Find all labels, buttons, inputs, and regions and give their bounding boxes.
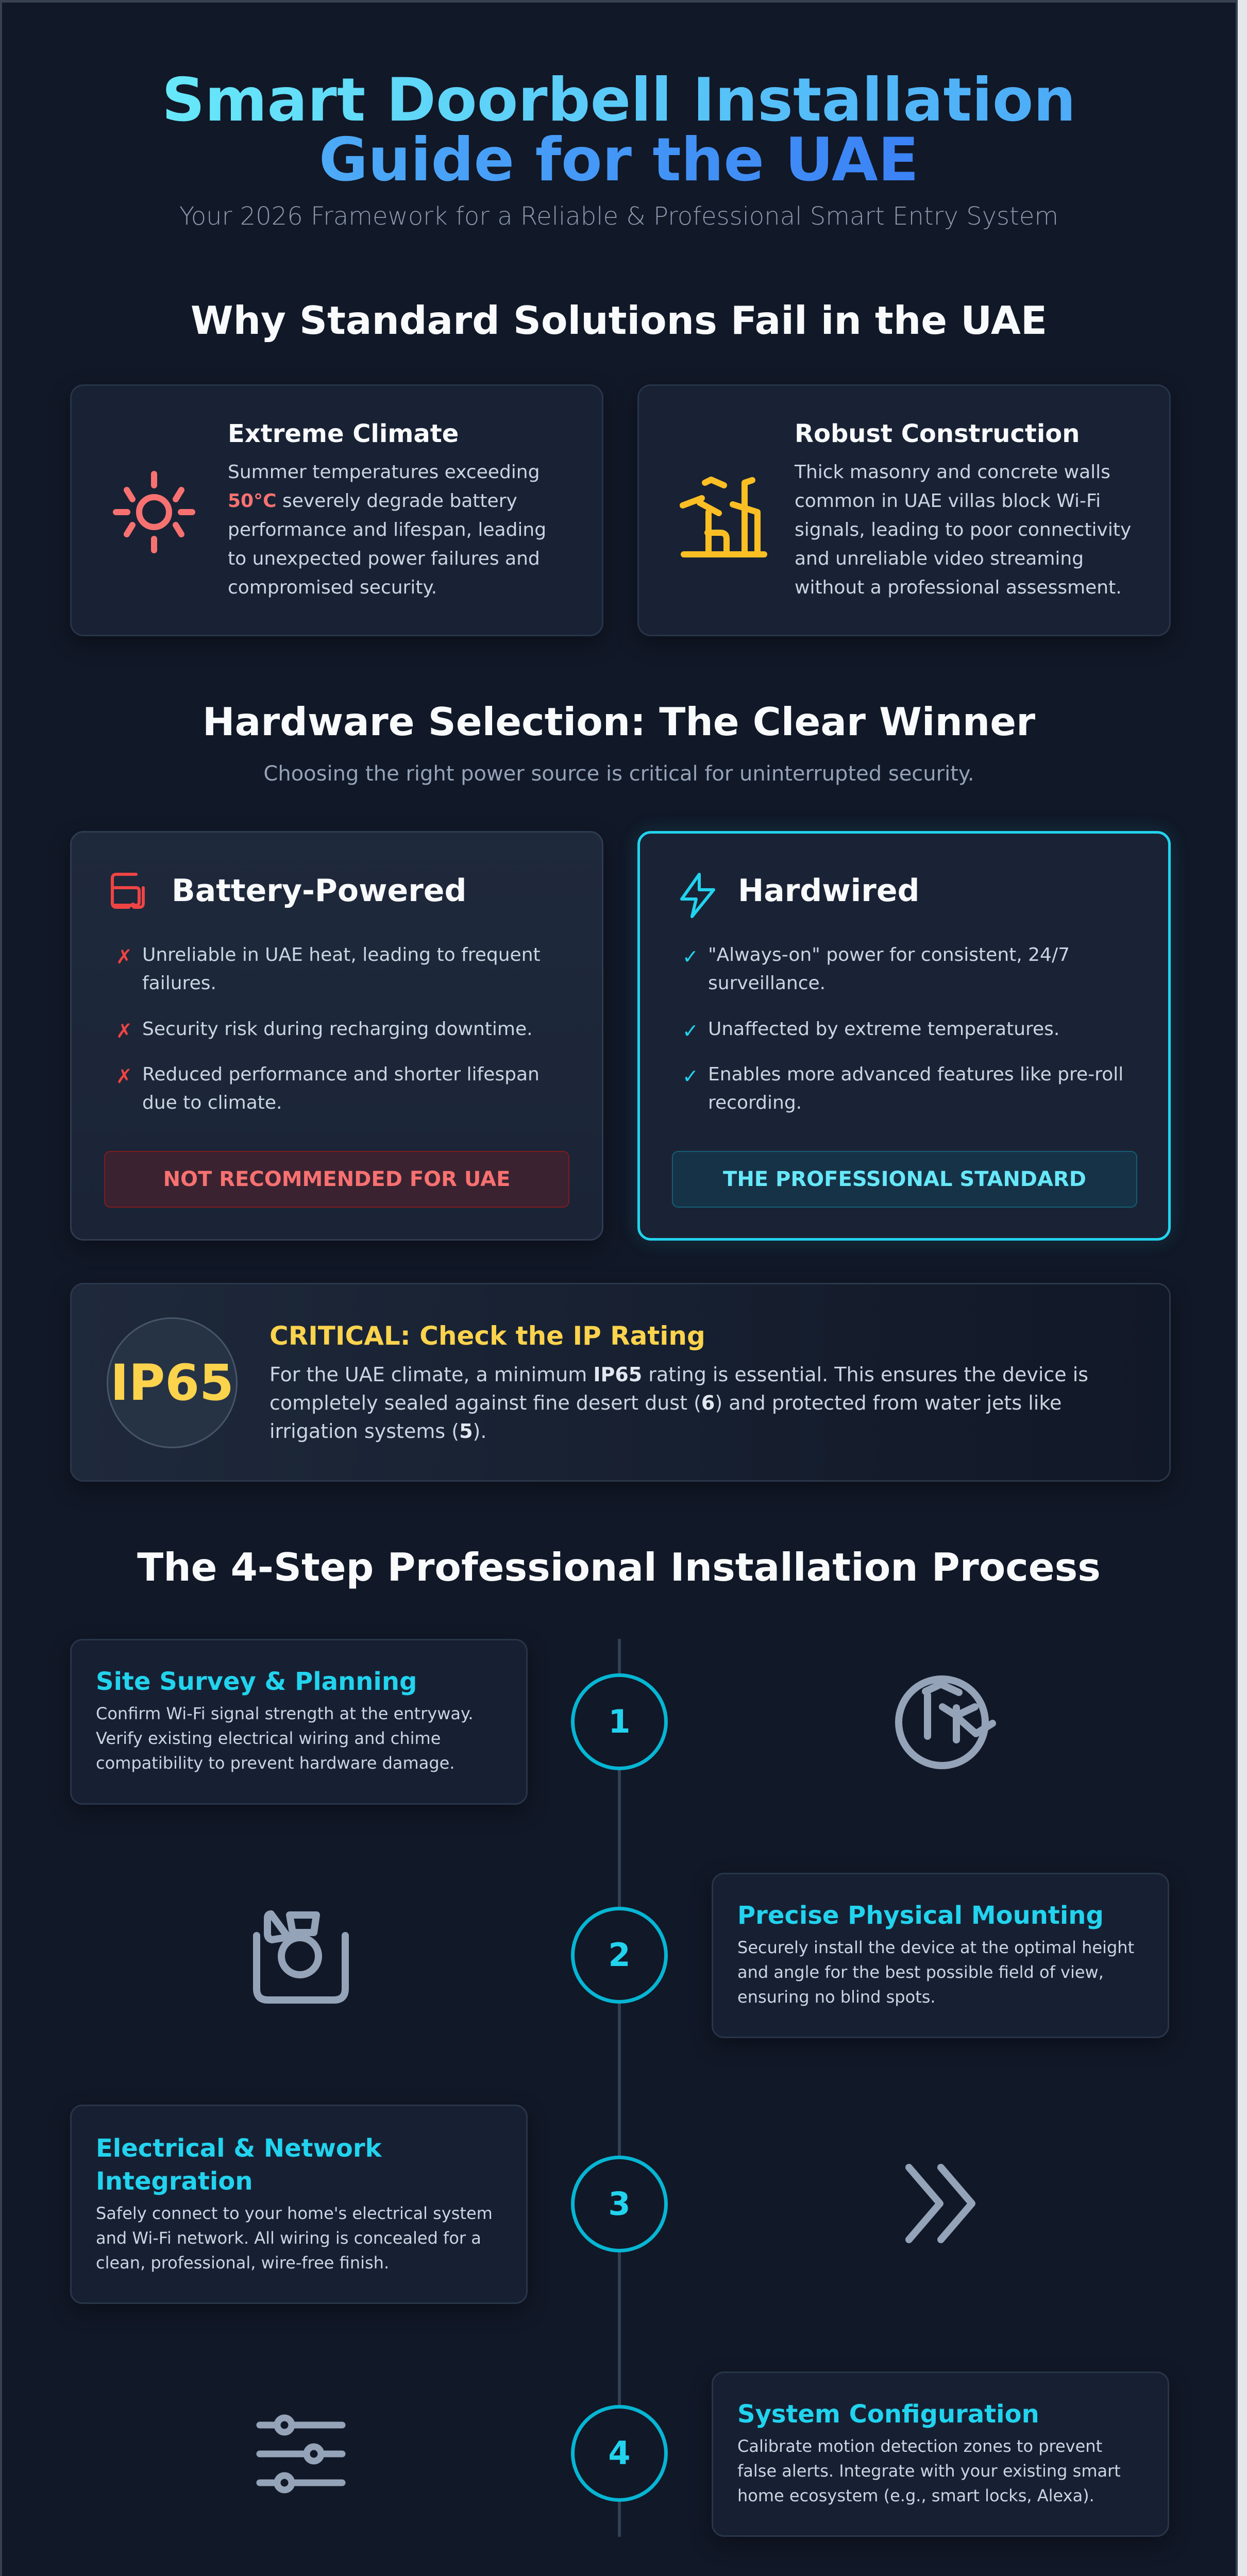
badge: not recommended: NOT RECOMMENDED FOR UAE: [163, 1167, 510, 1191]
text: extreme climate: Summer temperatures exceeding 50°C severely degrade battery performance and lifespan, leading to unexpected power failures and compromised security.: [228, 462, 546, 598]
step 4 card: Calibrate motion detection zones to prevent false alerts. Integrate with your existing smart home ecosystem (e.g., smart locks, Alexa).: [737, 2436, 1121, 2505]
subtitle: Your 2026 Framework for a Reliable & Professional Smart Entry System: [179, 202, 1058, 231]
step 3 card: [70, 2105, 528, 2304]
badge: professional standard: THE PROFESSIONAL STANDARD: [723, 1167, 1086, 1191]
step 4 number: [571, 2405, 668, 2502]
list: hardwired pros: Unaffected by extreme temperatures.: [708, 1019, 1059, 1040]
text: extreme climate: Extreme Climate: [228, 419, 459, 448]
list: battery cons: ✗: [116, 1065, 132, 1088]
step 1 card: [70, 1639, 528, 1805]
list: battery cons: Unreliable in UAE heat, leading to frequent failures.: [142, 944, 541, 994]
step 2 number: 2: [608, 1936, 631, 1974]
list: hardwired pros: ✓: [682, 1065, 699, 1088]
text: IP rating: [269, 1321, 1088, 1443]
step 2 card: Precise Physical Mounting: [737, 1901, 1104, 1930]
list: hardwired pros: ✓: [682, 945, 699, 968]
list: battery cons: ✗: [116, 1020, 132, 1042]
step 1 number: 1: [608, 1703, 631, 1740]
list: hardwired pros: ✓: [682, 1020, 699, 1042]
badge: professional standard: [672, 1151, 1137, 1208]
icon: building: [680, 477, 767, 557]
icon: battery: [111, 873, 145, 909]
heading: hardware selection: Hardware Selection: The Clear Winner: [203, 699, 1035, 744]
badge: not recommended: [104, 1151, 569, 1208]
step 3 card: Electrical & Network Integration: [96, 2134, 381, 2196]
heading: 4-step process: The 4-Step Professional Installation Process: [137, 1545, 1101, 1590]
list: battery cons: ✗: [116, 945, 132, 968]
icon: sun: [113, 471, 195, 553]
icon: lightning: [680, 873, 715, 918]
text: IP rating: For the UAE climate, a minimum IP65 rating is essential. This ensures the device is completely sealed against fine desert dust (6) and protected from water jets like irrigation systems (5).: [269, 1363, 1088, 1443]
text: robust construction: Robust Construction: [795, 419, 1080, 448]
step 3 card: Safely connect to your home's electrical system and Wi-Fi network. All wiring is concealed for a clean, professional, wire-free finish.: [96, 2204, 493, 2273]
list: hardwired pros: [682, 944, 1123, 1113]
list: battery cons: [116, 944, 541, 1113]
step 3 number: 3: [608, 2185, 631, 2223]
panel: battery-powered: [70, 831, 603, 1241]
panel: extreme climate: [70, 384, 603, 636]
title: Guide for the UAE: [319, 125, 919, 195]
panel: robust construction: [637, 384, 1171, 636]
icon: step 2 mounting: [253, 1910, 349, 2004]
step 2 number: [571, 1907, 668, 2004]
list: hardwired pros: "Always-on" power for consistent, 24/7 surveillance.: [708, 944, 1070, 994]
list: battery cons: Reduced performance and shorter lifespan due to climate.: [142, 1064, 540, 1113]
text: robust construction: Thick masonry and concrete walls common in UAE villas block Wi-Fi signals, leading to poor connectivity and unreliable video streaming without a professional assessment.: [795, 462, 1131, 598]
step 4 card: [712, 2371, 1169, 2537]
icon: step 1 survey: [895, 1675, 996, 1769]
list: hardwired pros: Enables more advanced features like pre-roll recording.: [708, 1064, 1123, 1113]
title: battery-powered: Battery-Powered: [172, 873, 466, 909]
panel: hardwired: [637, 831, 1171, 1241]
icon: step 3 chevrons: [905, 2164, 975, 2243]
icon: step 4 sliders: [257, 2414, 345, 2494]
timeline line: [618, 1639, 621, 2537]
panel: IP rating: [70, 1283, 1171, 1482]
text: IP rating: CRITICAL: Check the IP Rating: [269, 1321, 705, 1351]
badge: IP65 circle: [107, 1317, 238, 1448]
title: [162, 65, 1076, 195]
step 2 card: Securely install the device at the optimal height and angle for the best possible field of view, ensuring no blind spots.: [737, 1938, 1134, 2007]
step 1 number: [571, 1673, 668, 1770]
title: Smart Doorbell Installation: [162, 65, 1076, 135]
step 1 card: Confirm Wi-Fi signal strength at the entryway. Verify existing electrical wiring and chime compatibility to prevent hardware damage.: [96, 1704, 474, 1773]
heading: why standard solutions fail: Why Standard Solutions Fail in the UAE: [191, 298, 1047, 343]
step 4 number: 4: [608, 2434, 631, 2472]
step 2 card: [712, 1873, 1169, 2038]
title: hardwired: Hardwired: [738, 873, 919, 909]
step 1 card: Site Survey & Planning: [96, 1667, 417, 1696]
subheading: hardware: Choosing the right power source is critical for uninterrupted security.: [263, 762, 974, 786]
text: IP65: IP65: [110, 1354, 234, 1412]
step 4 card: System Configuration: [737, 2400, 1039, 2429]
step 3 number: [571, 2156, 668, 2252]
list: battery cons: Security risk during recharging downtime.: [142, 1019, 533, 1040]
